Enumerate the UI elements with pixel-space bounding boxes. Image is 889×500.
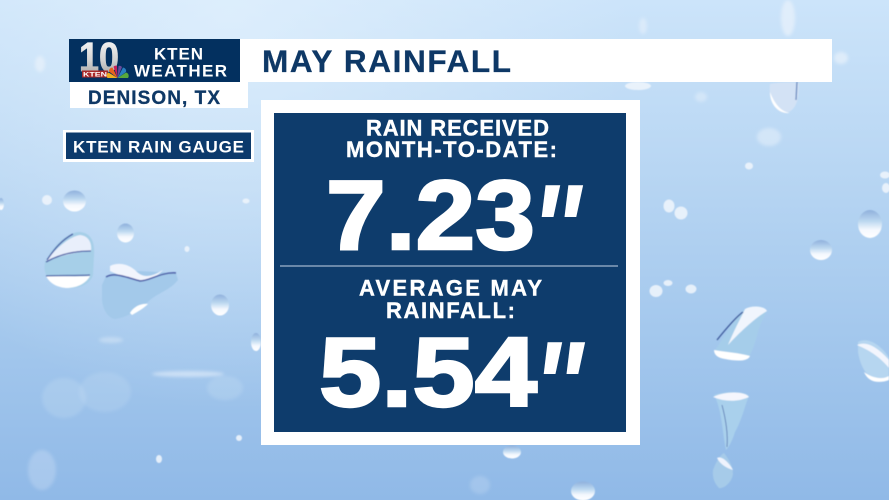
average value <box>319 315 586 457</box>
location label <box>70 82 248 109</box>
month-to-date value: " <box>530 158 584 300</box>
average value: " <box>532 315 586 457</box>
month-to-date label: RAIN RECEIVED <box>366 116 549 140</box>
source badge: KTEN Rain Gauge: KTEN RAIN GAUGE <box>73 138 244 156</box>
average label <box>359 276 542 323</box>
logo block: KTEN Weather: WEATHER <box>134 62 227 80</box>
month-to-date value <box>326 158 584 300</box>
month-to-date label <box>346 116 557 162</box>
average label: RAINFALL: <box>386 298 515 323</box>
white speck droplets <box>42 82 889 463</box>
small droplets with white lower half <box>0 190 882 500</box>
logo: channel 10: 10 <box>79 34 119 80</box>
large droplets <box>44 82 889 488</box>
logo: channel 10: KTEN <box>83 72 107 78</box>
icon: peacock <box>107 66 129 78</box>
panel: rainfall stats <box>261 100 640 457</box>
title bar <box>240 39 832 82</box>
location label: DENISON, TX <box>88 88 220 109</box>
average value: 5.54 <box>319 317 537 427</box>
month-to-date value: 7.23 <box>326 160 535 270</box>
heading: MAY RAINFALL <box>262 43 511 79</box>
average label: AVERAGE MAY <box>359 276 542 300</box>
logo block: KTEN Weather <box>69 34 240 82</box>
logo text: KTEN <box>154 44 203 64</box>
month-to-date label: MONTH-TO-DATE: <box>346 137 557 162</box>
source badge: KTEN Rain Gauge <box>63 130 254 162</box>
